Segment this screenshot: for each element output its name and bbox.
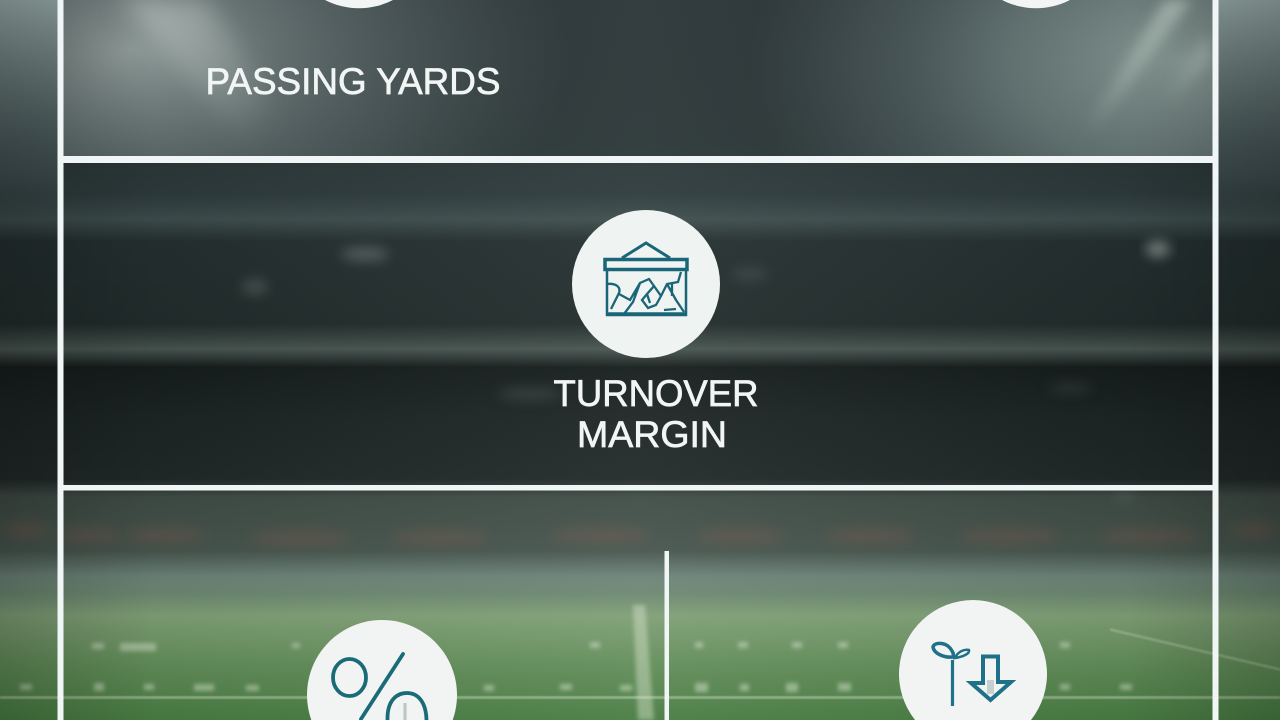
label: turnover margin: [554, 373, 758, 455]
icon: percentage: [307, 620, 457, 720]
label: turnover margin: TURNOVER: [554, 373, 758, 414]
icon: building with broken wall: [572, 210, 720, 358]
blurred stadium lights: [242, 241, 1170, 499]
panel: turnover margin: [554, 210, 758, 455]
field markings: [0, 605, 1280, 720]
floodlight glow and beams: [0, 0, 1280, 215]
label: turnover margin: MARGIN: [577, 414, 727, 455]
icon circle: top right (cropped): [1002, 0, 1070, 8]
label: passing yards: PASSING YARDS: [206, 61, 500, 102]
icon: sprout and down arrow: [899, 600, 1047, 720]
blurred crowd: [2, 521, 1278, 547]
panel: passing yards: [206, 0, 500, 102]
icon circle: passing yards (cropped): [325, 0, 393, 8]
